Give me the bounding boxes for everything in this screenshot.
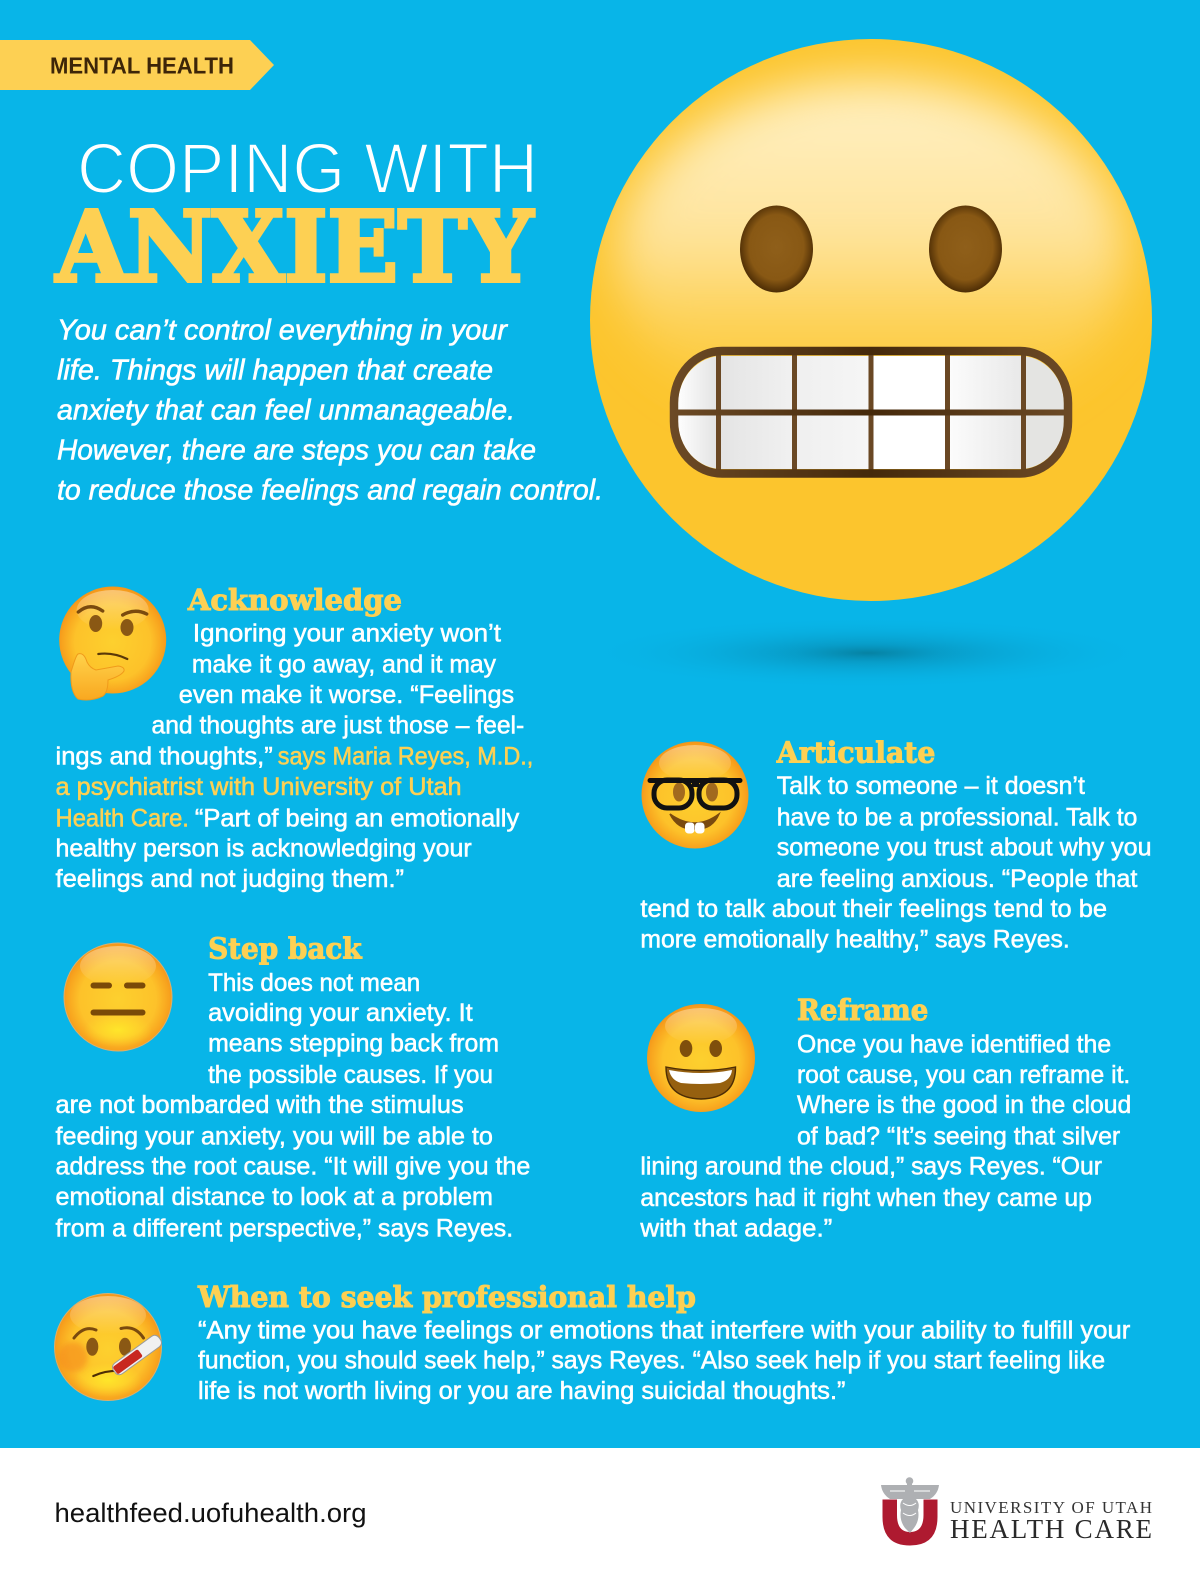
text block: step back: feeding your anxiety, you will be able to xyxy=(56,1122,493,1150)
text block: step back: the possible causes. If you xyxy=(208,1061,493,1089)
intro paragraph: You can’t control everything in your xyxy=(57,314,509,346)
text block: acknowledge: even make it worse. “Feelings xyxy=(179,681,514,709)
text block: acknowledge: make it go away, and it may xyxy=(192,651,496,679)
text block: when to seek help xyxy=(198,1316,1130,1405)
footer xyxy=(0,1448,1200,1584)
icon: large grimacing face xyxy=(590,39,1152,601)
heading: step back: Step back xyxy=(208,931,362,966)
text block: reframe: with that adage.” xyxy=(639,1214,832,1242)
text block: when to seek help: “Any time you have feelings or emotions that interfere with your ability to fulfill your xyxy=(198,1316,1130,1344)
icon: face with thermometer xyxy=(54,1294,163,1400)
text block: acknowledge: feelings and not judging them.” xyxy=(56,865,404,893)
text block: step back: avoiding your anxiety. It xyxy=(208,999,473,1027)
text block: articulate: have to be a professional. Talk to xyxy=(777,803,1137,831)
icon: thinking face xyxy=(59,586,166,700)
text block: acknowledge: a psychiatrist with University of Utah xyxy=(56,773,462,801)
text block: step back: emotional distance to look at a problem xyxy=(56,1183,493,1211)
logo: university of utah health care: HEALTH CARE xyxy=(950,1514,1152,1544)
text block: acknowledge: Health Care. xyxy=(56,804,189,832)
icon: nerd face xyxy=(642,742,748,848)
text block: reframe: of bad? “It’s seeing that silver xyxy=(797,1122,1120,1150)
text block: articulate: are feeling anxious. “People that xyxy=(777,865,1137,893)
logo: university of utah health care: UNIVERSITY OF UTAH xyxy=(950,1498,1152,1517)
intro paragraph: However, there are steps you can take xyxy=(57,434,536,466)
text block: articulate: someone you trust about why you xyxy=(777,834,1152,862)
text block: acknowledge: ings and thoughts,” xyxy=(56,743,273,771)
intro paragraph: to reduce those feelings and regain control. xyxy=(57,474,603,506)
text block: acknowledge: healthy person is acknowledging your xyxy=(56,835,472,863)
text block: acknowledge: and thoughts are just those – feel- xyxy=(152,711,524,739)
text block: reframe: Where is the good in the cloud xyxy=(797,1091,1131,1119)
text block: acknowledge: “Part of being an emotionally xyxy=(195,804,520,832)
text block: step back: This does not mean xyxy=(208,969,420,997)
heading: acknowledge: Acknowledge xyxy=(187,582,402,617)
text block: reframe xyxy=(639,1031,1131,1242)
text block: step back xyxy=(56,969,530,1242)
text block: when to seek help: life is not worth living or you are having suicidal thoughts.” xyxy=(198,1377,845,1405)
text block: articulate: more emotionally healthy,” says Reyes. xyxy=(640,925,1070,953)
intro paragraph: life. Things will happen that create xyxy=(57,354,493,386)
text block: acknowledge xyxy=(56,619,533,893)
text block: when to seek help: function, you should seek help,” says Reyes. “Also seek help if you start feeling like xyxy=(198,1347,1105,1375)
heading: reframe: Reframe xyxy=(797,992,928,1027)
text block: step back: address the root cause. “It will give you the xyxy=(56,1153,530,1181)
footer url: healthfeed.uofuhealth.org xyxy=(54,1498,366,1528)
face shadow xyxy=(583,617,1153,689)
text block: articulate: tend to talk about their feelings tend to be xyxy=(640,895,1107,923)
text block: reframe: root cause, you can reframe it. xyxy=(797,1061,1130,1089)
heading: articulate: Articulate xyxy=(776,735,935,770)
text block: reframe: lining around the cloud,” says Reyes. “Our xyxy=(640,1153,1102,1181)
title xyxy=(55,130,538,304)
text block: acknowledge: Ignoring your anxiety won’t xyxy=(193,619,501,647)
text block: articulate xyxy=(640,772,1152,953)
title: ANXIETY xyxy=(55,190,535,304)
panel: reframe xyxy=(639,992,1131,1242)
panel: acknowledge xyxy=(56,582,533,893)
panel: step back xyxy=(56,931,530,1242)
panel: articulate xyxy=(640,735,1152,953)
text block: acknowledge: says Maria Reyes, M.D., xyxy=(278,743,533,771)
logo: university of utah health care xyxy=(881,1477,1152,1546)
text block: step back: from a different perspective,” says Reyes. xyxy=(56,1214,513,1242)
text block: reframe: Once you have identified the xyxy=(797,1031,1111,1059)
text block: step back: means stepping back from xyxy=(208,1030,499,1058)
category banner xyxy=(0,40,274,90)
title: COPING WITH xyxy=(77,130,538,209)
text block: articulate: Talk to someone – it doesn’t xyxy=(777,772,1085,800)
intro paragraph: anxiety that can feel unmanageable. xyxy=(57,394,515,426)
category banner: MENTAL HEALTH xyxy=(50,52,234,78)
icon: smiling face xyxy=(647,1004,755,1112)
text block: step back: are not bombarded with the stimulus xyxy=(56,1091,464,1119)
heading: when to seek help: When to seek professional help xyxy=(197,1279,696,1314)
panel: when to seek professional help xyxy=(54,1279,1130,1405)
intro paragraph xyxy=(57,314,603,506)
icon: expressionless face xyxy=(64,943,172,1051)
text block: reframe: ancestors had it right when they came up xyxy=(640,1184,1092,1212)
